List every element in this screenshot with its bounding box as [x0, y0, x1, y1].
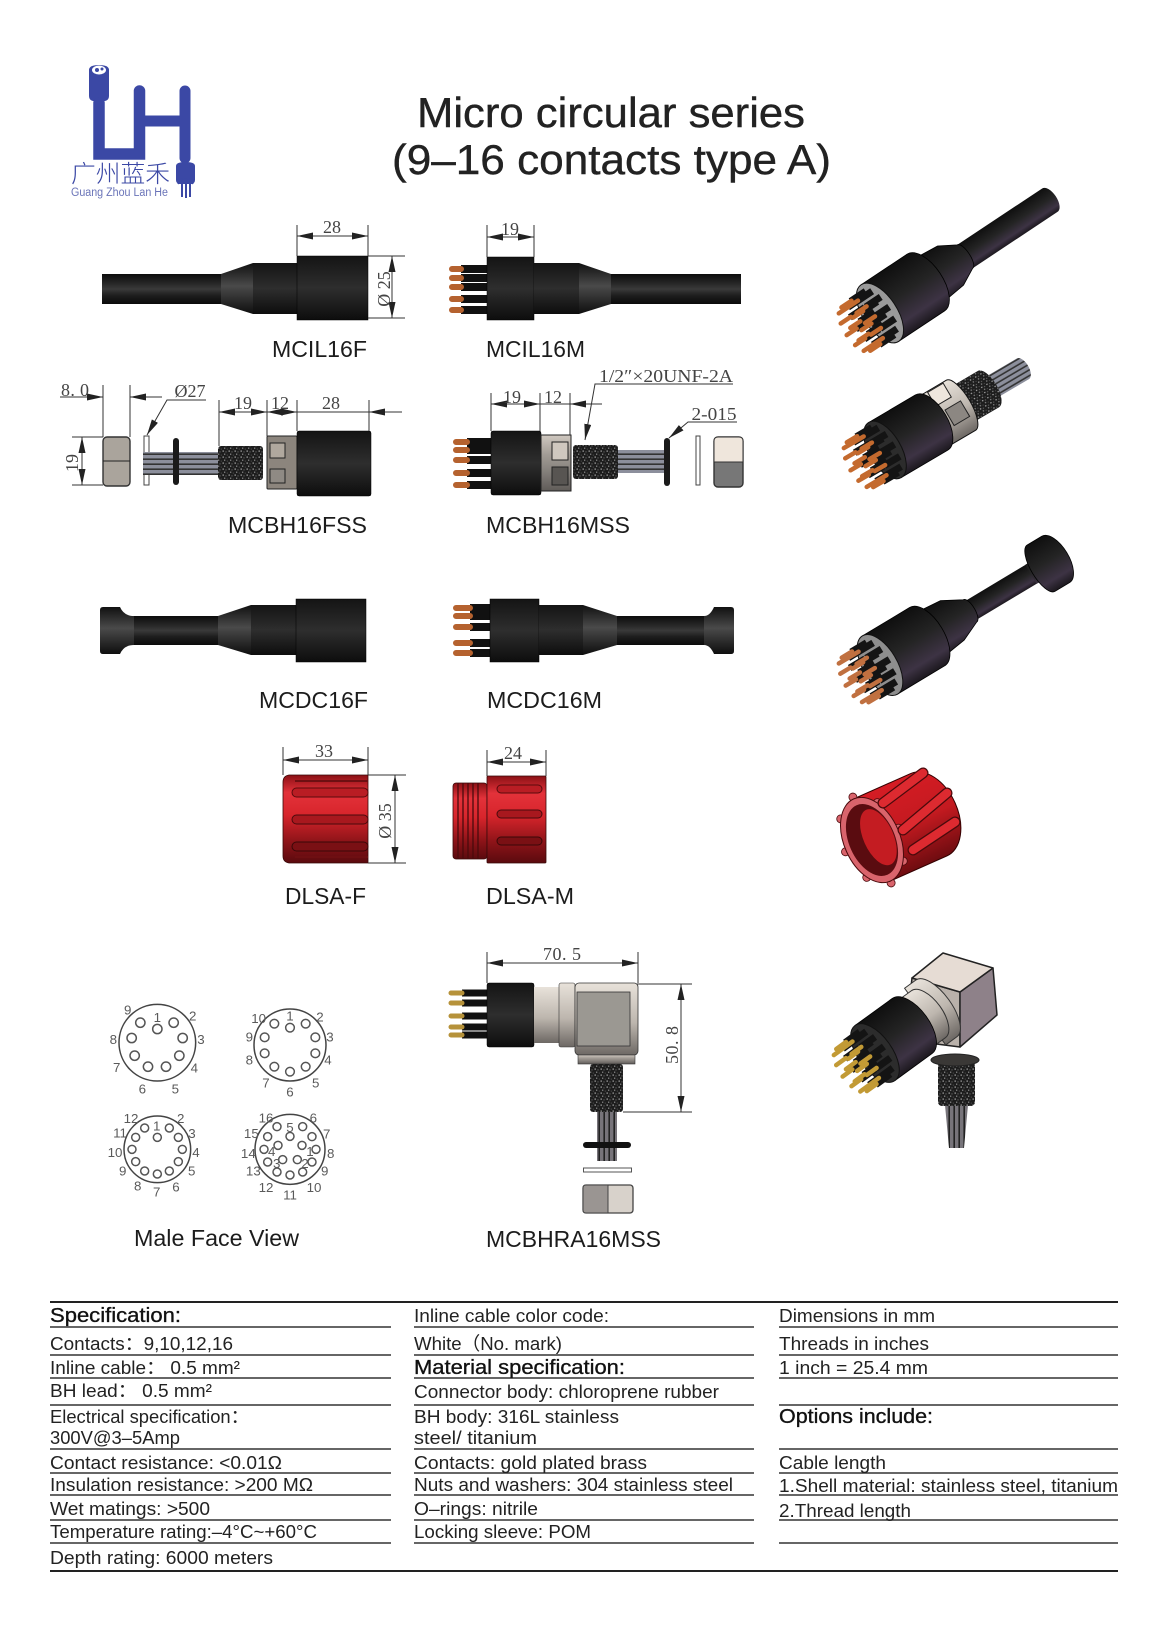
nut	[714, 437, 743, 487]
row: shell material: 1.Shell material: stainless steel, titanium	[779, 1475, 1118, 1496]
face view: 9 contacts: 6	[139, 1081, 146, 1096]
face view: 9 contacts: 9	[124, 1003, 131, 1018]
hex body	[541, 435, 571, 491]
row: contact resistance: Contact resistance: <0.01Ω	[50, 1452, 282, 1473]
dimension: 70.5	[487, 944, 638, 983]
washer	[144, 436, 149, 485]
face view: 9 contacts: 8	[110, 1032, 117, 1047]
face view: 9 contacts: 5	[172, 1081, 179, 1096]
face view: 12 contacts: 11	[113, 1125, 127, 1140]
washer	[696, 436, 700, 485]
nut	[103, 437, 130, 486]
face view: 12 contacts: 5	[188, 1164, 195, 1179]
3D render: red locking sleeve	[821, 756, 976, 900]
dimensions: 19, 12, 28: 28	[322, 393, 340, 413]
row: o-rings: O–rings: nitrile	[414, 1498, 538, 1519]
row: nuts and washers: Nuts and washers: 304 stainless steel	[414, 1474, 733, 1495]
label: MCDC16F: MCDC16F	[259, 687, 368, 713]
face view: 12 contacts: 4	[192, 1145, 200, 1160]
row: inline cable color code: Inline cable color code:	[414, 1305, 609, 1326]
thread	[590, 1064, 623, 1112]
wires	[143, 452, 218, 475]
dimensions: 19, 12	[491, 387, 602, 435]
dimensions: 19, 12, 28: 12	[271, 393, 289, 413]
title	[392, 89, 831, 183]
row: insulation resistance: Insulation resistance: >200 MΩ	[50, 1474, 313, 1495]
face view: 10 contacts: 2	[316, 1009, 324, 1024]
face view: 12 contacts: 10	[108, 1145, 122, 1160]
column: materials	[414, 1305, 733, 1542]
3D render: right-angle connector	[822, 953, 997, 1148]
drawing: MCIL16M inline male connector	[452, 219, 741, 320]
row: thread length: 2.Thread length	[779, 1500, 911, 1521]
logo: Guang Zhou Lan He	[71, 65, 195, 199]
face view: 12 contacts: 6	[172, 1179, 180, 1194]
label: MCBHRA16MSS: MCBHRA16MSS	[486, 1226, 661, 1252]
face view: 10 contacts: 10	[251, 1011, 266, 1026]
dimension: diameter 35: Ø 35	[375, 803, 395, 839]
thread	[218, 446, 263, 480]
face view: 12 contacts: 2	[177, 1111, 184, 1126]
washer	[584, 1168, 632, 1172]
dimension: 50.8: 50. 8	[662, 1026, 682, 1064]
title: Micro circular series	[417, 89, 805, 136]
row: wet matings: Wet matings: >500	[50, 1498, 210, 1519]
face view: 16 contacts: 2	[301, 1156, 309, 1171]
face view: 10 contacts: 6	[286, 1085, 294, 1100]
face view: 16 contacts: 1	[306, 1144, 314, 1159]
wires	[597, 1112, 617, 1161]
dimension: 19 height: 19	[62, 454, 82, 472]
face view: 16 contacts: 15	[244, 1126, 259, 1141]
face view: 9 contacts: 3	[197, 1032, 205, 1047]
face view: 16 contacts: 8	[327, 1146, 334, 1161]
face view: 16 contacts: 16	[259, 1111, 273, 1126]
dimension: diameter 27 leader	[147, 381, 206, 435]
face view: 12 contacts	[108, 1111, 200, 1200]
drawing: MCBH16MSS bulkhead male connector	[456, 366, 743, 495]
face view: 10 contacts: 3	[326, 1029, 334, 1044]
heading: Material specification: Material specification:	[414, 1356, 625, 1379]
drawing: MCIL16F inline female connector	[102, 217, 405, 320]
specification table	[50, 1302, 1118, 1571]
dimension: 70.5: 70. 5	[543, 944, 581, 964]
drawing: MCBHRA16MSS right-angle bulkhead connector	[451, 944, 692, 1213]
thread callout: 1/2 x 20UNF-2A	[585, 366, 733, 440]
row: contacts: Contacts：9,10,12,16	[50, 1333, 233, 1354]
face view: 16 contacts: 3	[273, 1156, 280, 1171]
o-ring callout: 2-015	[669, 404, 737, 438]
face view: 9 contacts: 2	[189, 1009, 196, 1024]
dimension: 8.0	[60, 380, 162, 437]
row: steel titanium: steel/ titanium	[414, 1427, 537, 1448]
title: (9–16 contacts type A)	[392, 136, 831, 183]
face view: 16 contacts: 13	[246, 1164, 261, 1179]
face view: 16 contacts: 6	[310, 1111, 317, 1126]
drawing: MCDC16F dummy cap female connector	[100, 599, 366, 662]
face view: 12 contacts: 1	[153, 1119, 160, 1134]
face view: 12 contacts: 12	[124, 1111, 138, 1126]
3D render: inline connector	[828, 168, 1075, 363]
column: specification	[50, 1304, 317, 1568]
column: units and options	[779, 1305, 1118, 1521]
face view: 12 contacts: 7	[153, 1185, 160, 1200]
drawing: DLSA-M red locking sleeve	[453, 743, 546, 863]
face view: 16 contacts: 14	[241, 1146, 256, 1161]
nut	[583, 1185, 633, 1213]
row: voltage: 300V@3–5Amp	[50, 1427, 180, 1448]
face view: 9 contacts: 7	[113, 1060, 120, 1075]
face view: 9 contacts: 1	[154, 1010, 161, 1025]
face view: 10 contacts: 9	[246, 1029, 253, 1044]
label: MCDC16M: MCDC16M	[487, 687, 602, 713]
face view: 10 contacts: 5	[312, 1075, 319, 1090]
face view: 12 contacts: 9	[119, 1164, 126, 1179]
dimension: 19 height	[62, 437, 103, 485]
3D render: bulkhead connector	[834, 338, 1044, 498]
row: BH body: BH body: 316L stainless	[414, 1406, 619, 1427]
face view: 16 contacts: 7	[323, 1127, 330, 1142]
logo Chinese name: 广州蓝禾	[71, 161, 170, 188]
dimension: diameter 27 leader: Ø27	[174, 381, 206, 401]
row: contacts material: Contacts: gold plated brass	[414, 1452, 647, 1473]
row: BH lead: BH lead： 0.5 mm²	[50, 1380, 212, 1401]
dimension: 19: 19	[501, 219, 519, 239]
label: DLSA-F: DLSA-F	[285, 883, 366, 909]
heading: Specification: Specification:	[50, 1304, 181, 1327]
label: MCBH16MSS: MCBH16MSS	[486, 512, 630, 538]
wires	[618, 450, 664, 473]
row: white: White（No. mark)	[414, 1333, 562, 1354]
face view diagrams: 9, 10, 12, 16 contacts	[108, 1003, 334, 1203]
logo icon: LH cable connector mark	[89, 65, 195, 198]
face view: 10 contacts	[246, 1009, 334, 1100]
face view: 9 contacts	[110, 1003, 205, 1096]
label: DLSA-M: DLSA-M	[486, 883, 574, 909]
dimensions: 19, 12: 19	[503, 387, 521, 407]
row: temperature rating: Temperature rating:–4°C~+60°C	[50, 1521, 317, 1542]
dimension: 28: 28	[323, 217, 341, 237]
dimension: 33: 33	[315, 741, 333, 761]
face view: 9 contacts: 4	[191, 1061, 199, 1076]
o-ring	[583, 1142, 631, 1148]
label: MCBH16FSS: MCBH16FSS	[228, 512, 367, 538]
face view: 12 contacts: 8	[134, 1179, 141, 1194]
dimensions: 19, 12, 28: 19	[234, 393, 252, 413]
drawing: DLSA-F red locking sleeve	[283, 741, 406, 863]
face view: 16 contacts: 11	[283, 1188, 297, 1203]
face view: 10 contacts: 7	[262, 1075, 270, 1090]
table rules	[50, 1302, 1118, 1571]
row: depth rating: Depth rating: 6000 meters	[50, 1547, 273, 1568]
o-ring	[173, 438, 179, 485]
dimension: 50.8	[623, 984, 692, 1112]
o-ring	[664, 438, 670, 486]
row: connector body: Connector body: chloroprene rubber	[414, 1381, 719, 1402]
face view: 16 contacts: 10	[307, 1180, 321, 1195]
face view: 12 contacts: 3	[188, 1126, 196, 1141]
dimensions: 19, 12, 28	[219, 393, 402, 446]
thread callout: 1/2 x 20UNF-2A: 1/2″×20UNF-2A	[599, 366, 733, 386]
row: inline cable: Inline cable： 0.5 mm²	[50, 1357, 240, 1378]
dimension: diameter 25: Ø 25	[374, 271, 394, 307]
face view: 10 contacts: 4	[324, 1053, 332, 1068]
face view: 16 contacts	[241, 1111, 334, 1203]
dimension: 19	[487, 219, 534, 257]
face view: 16 contacts: 4	[268, 1144, 276, 1159]
row: electrical specification: Electrical specification：	[50, 1406, 249, 1427]
dimension: diameter 25	[368, 256, 405, 318]
row: dimensions: Dimensions in mm	[779, 1305, 935, 1326]
label: Male Face View: Male Face View	[134, 1225, 299, 1251]
dimension: 24: 24	[504, 743, 522, 763]
row: inch conversion: 1 inch = 25.4 mm	[779, 1357, 928, 1378]
thread	[573, 445, 618, 479]
dimension: 8.0: 8. 0	[61, 380, 89, 400]
hex body	[267, 436, 297, 489]
label: MCIL16F: MCIL16F	[272, 336, 367, 362]
face view: 16 contacts: 5	[286, 1120, 294, 1135]
face view: 16 contacts: 12	[259, 1180, 273, 1195]
o-ring callout: 2-015: 2-015	[692, 404, 736, 424]
3D render: dummy cap connector	[828, 524, 1084, 715]
face view: 10 contacts: 1	[286, 1009, 294, 1024]
row: cable length: Cable length	[779, 1452, 886, 1473]
dimension: 28	[297, 217, 368, 256]
drawing: MCBH16FSS bulkhead female connector	[60, 380, 402, 496]
logo English name: Guang Zhou Lan He	[71, 187, 168, 199]
dimensions: 19, 12: 12	[544, 387, 562, 407]
face view: 16 contacts: 9	[321, 1164, 328, 1179]
row: threads: Threads in inches	[779, 1333, 929, 1354]
row: locking sleeve: Locking sleeve: POM	[414, 1521, 591, 1542]
face view: 10 contacts: 8	[246, 1053, 253, 1068]
heading: Options include: Options include:	[779, 1405, 933, 1428]
label: MCIL16M: MCIL16M	[486, 336, 585, 362]
drawing: MCDC16M dummy cap male connector	[456, 599, 734, 662]
